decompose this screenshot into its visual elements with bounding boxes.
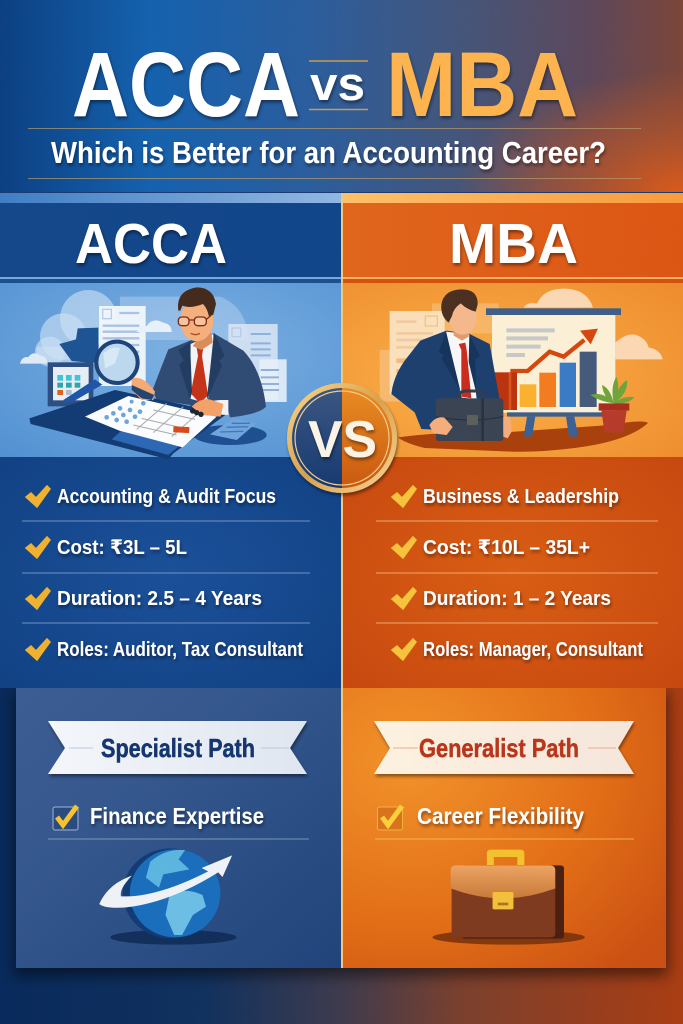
presentation board [492,314,615,413]
icon: briefcase [432,850,585,945]
trend arrow [510,340,584,371]
head [454,323,469,341]
row: cost: Cost: ₹10L – 35L+ [423,537,590,559]
row: cost: Cost: ₹3L – 5L [57,537,187,559]
magnifier [63,379,102,403]
clouds [524,289,663,359]
head [193,333,213,350]
heading: MBA: MBA [449,212,578,276]
panel: MBA column [343,193,683,688]
red books [494,372,517,410]
documents right [228,324,278,401]
panel: specialist path [16,688,341,968]
VS badge: VS [308,411,377,469]
illustration: manager with presentation board [380,289,663,452]
subtitle: Which is Better for an Accounting Career? [51,135,606,170]
icon: globe with arrow [99,848,236,945]
title: vs [310,57,365,110]
ribbon: specialist path: Specialist Path [101,733,255,763]
suit body [153,333,266,417]
glasses [178,315,211,326]
title: MBA [386,34,578,136]
heading: ACCA: ACCA [75,212,227,276]
title: ACCA [72,34,300,136]
ribbon: generalist path [374,721,634,774]
clouds [35,290,248,367]
ribbon: specialist path [48,721,307,774]
row: focus: Business & Leadership [423,486,619,508]
row: focus: Accounting & Audit Focus [57,486,276,508]
suit [391,331,501,432]
plant [590,377,634,404]
VS badge [287,383,397,493]
small keypad [210,418,256,440]
briefcase [458,391,485,399]
floor shadow [398,421,648,452]
centre divider [341,193,343,968]
board legs [524,417,578,437]
desk shadow [193,425,267,445]
item: finance expertise: Finance Expertise [90,803,264,829]
list: MBA facts [376,486,658,661]
calendar paper [85,396,217,447]
item: career flexibility: Career Flexibility [417,803,584,829]
shirt and tie [190,334,214,403]
ribbon: generalist path: Generalist Path [419,733,579,763]
row: duration: Duration: 1 – 2 Years [423,588,611,610]
forearm and hand on desk [195,400,228,415]
illustration: accountant with magnifier [20,287,287,459]
background document [380,350,423,402]
document left [99,306,146,386]
panel: ACCA column [0,193,341,688]
dark leaf shape [59,328,98,363]
row: duration: Duration: 2.5 – 4 Years [57,588,262,610]
title [72,34,578,136]
bars [520,384,536,407]
row: roles: Roles: Auditor, Tax Consultant [57,639,303,661]
hands [429,417,453,435]
row: roles: Roles: Manager, Consultant [423,639,643,661]
panel: generalist path [343,688,666,968]
list: ACCA facts [22,486,310,661]
tablet [48,362,93,406]
desk [29,390,227,459]
